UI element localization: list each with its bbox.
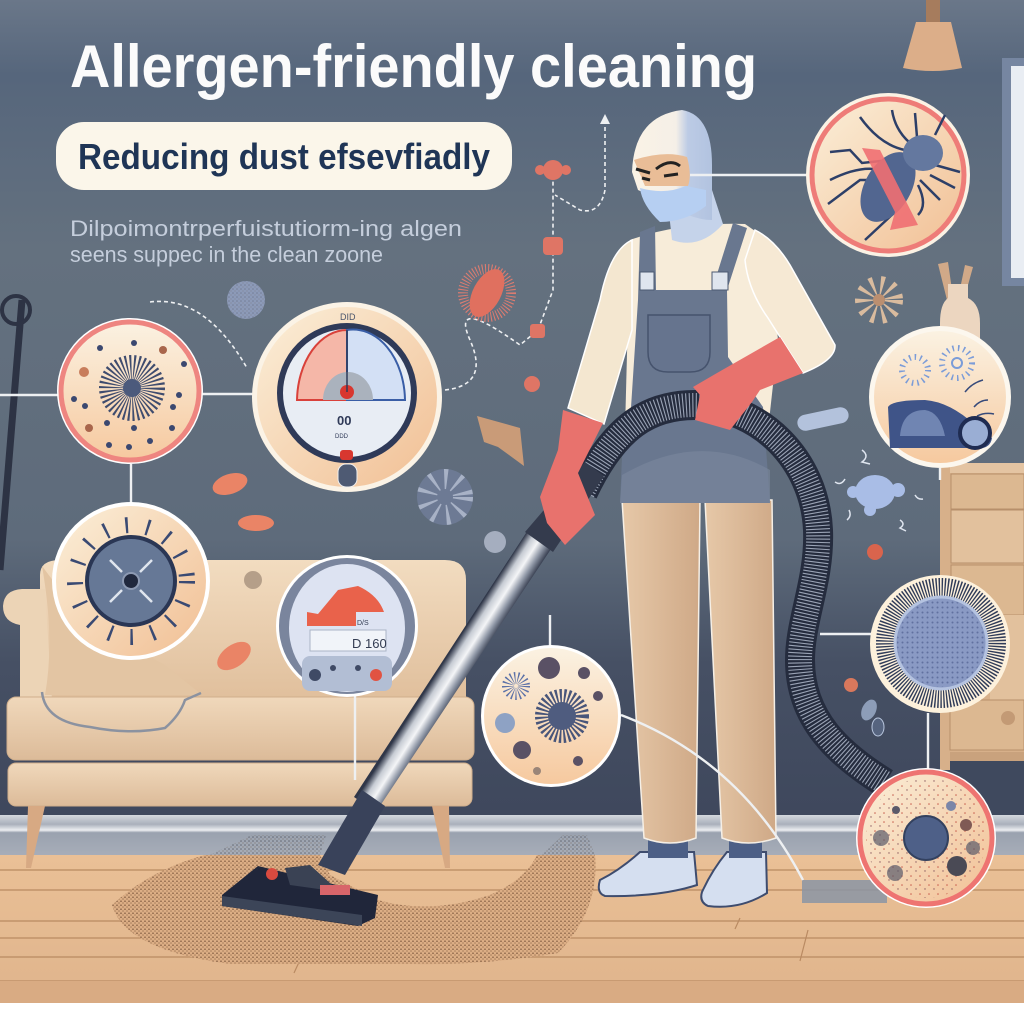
meter buttons [302, 656, 392, 691]
eyebrows and eyes [636, 163, 680, 180]
callout: spore [57, 318, 203, 464]
vacuum cleaner [222, 405, 887, 926]
robot vacuum [888, 400, 992, 448]
icon: small spore [484, 531, 506, 553]
sofa arm [3, 589, 52, 700]
icon: red dot [867, 544, 883, 560]
shirt torso [625, 224, 778, 430]
sofa back [40, 560, 466, 700]
apron [620, 223, 770, 503]
right arm [745, 230, 835, 373]
hood [632, 110, 712, 220]
person [568, 110, 835, 907]
icon: orange pollen grains [210, 469, 274, 676]
apron pocket [648, 315, 710, 372]
cushion pillow [42, 566, 202, 695]
icon: small capsules [844, 678, 884, 736]
icon: brown leaf [477, 416, 524, 466]
icon: dotted speck [244, 571, 262, 589]
callout: gauge: DDD [335, 434, 349, 440]
callout: dust under magnifier [856, 768, 996, 908]
neck wrap [667, 190, 723, 243]
blue allergen sketches [902, 348, 972, 383]
lower wand [318, 790, 385, 875]
wood floor [0, 855, 1024, 1003]
callout: brush filter [870, 575, 1010, 713]
sofa [3, 560, 474, 868]
icon: blue roll [796, 406, 850, 432]
icon: red bacterium [462, 263, 512, 323]
subtitle pill [56, 122, 512, 190]
subtitle pill: Reducing dust efsevfiadly [78, 136, 490, 177]
dust trail on floor [112, 855, 596, 964]
brush attachment [802, 880, 887, 903]
baseboard [0, 815, 1024, 857]
socks [648, 838, 762, 858]
trousers [622, 500, 776, 843]
gauge label: DID [340, 312, 356, 322]
title: Allergen-friendly cleaning [70, 33, 757, 100]
broom pole at left [0, 296, 30, 570]
gauge readout: 00 [337, 413, 351, 428]
shoes [599, 852, 767, 907]
callout: meter [276, 555, 418, 697]
strap buckles [640, 272, 728, 290]
gauge blue half [347, 330, 405, 400]
callout: spores cluster [481, 645, 621, 787]
icon: grey shell spore [417, 469, 473, 525]
dresser [940, 463, 1024, 815]
callout: meter: D 160 [352, 636, 387, 651]
icon: beige star spore [864, 285, 894, 315]
callout: gauge [252, 302, 442, 492]
surrounding particles [71, 340, 187, 450]
mite body [849, 143, 927, 231]
seat cushions [7, 697, 474, 760]
gauge dial [323, 372, 373, 400]
meter red chart [307, 586, 384, 626]
description text [70, 216, 462, 267]
callout: dust mite [806, 93, 970, 257]
connector to mite callout [690, 174, 808, 176]
left arm [568, 240, 632, 424]
face mask [640, 186, 706, 222]
description text: Dilpoimontrperfuistutiorm-ing algen [70, 216, 462, 241]
wand [354, 530, 553, 812]
callout: filter disc [52, 502, 210, 660]
sofa legs [26, 806, 450, 868]
handle grip [525, 462, 604, 552]
prohibition arrow [862, 148, 918, 230]
ceiling lamp [903, 0, 962, 71]
gauge red half [297, 330, 347, 400]
window frame [1002, 58, 1024, 286]
icon: dust ball [227, 281, 265, 319]
icon: blue blob allergen [835, 450, 923, 531]
gauge knob [338, 450, 357, 487]
floor nozzle [222, 865, 378, 926]
mite legs [828, 110, 960, 240]
floating allergen icons [210, 160, 923, 736]
vase with reeds [938, 262, 980, 358]
face [634, 154, 690, 186]
icon: pink flowers [524, 160, 571, 392]
dust on the baseboard [210, 835, 595, 855]
gloves [540, 337, 803, 545]
brush tube [621, 715, 803, 880]
white bottom margin [0, 1003, 1024, 1024]
sofa cord [42, 692, 201, 731]
hose [583, 405, 885, 783]
description text: seens suppec in the clean zoone [70, 242, 383, 267]
gauge body [280, 326, 414, 460]
callout: meter: D/S [357, 620, 369, 627]
main spore [548, 702, 576, 730]
connector lines [0, 114, 940, 780]
callout: vacuum [869, 326, 1011, 468]
meter readout [310, 630, 386, 651]
motion lines [965, 380, 994, 416]
